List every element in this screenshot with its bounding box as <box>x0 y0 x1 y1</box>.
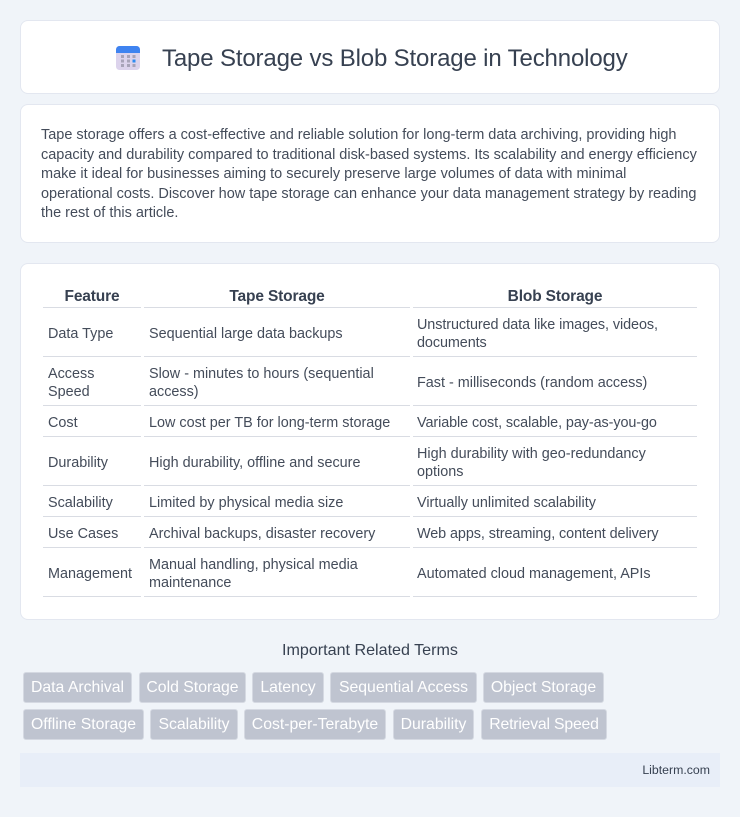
intro paragraph: the rest of this article. <box>41 205 178 221</box>
intro card <box>20 104 720 243</box>
related terms tags <box>23 672 607 740</box>
comparison table: Sequential large data backups <box>149 326 343 342</box>
related terms tags: Cost-per-Terabyte <box>252 716 378 733</box>
comparison table: access) <box>149 384 199 400</box>
intro paragraph: capacity and durability compared to traditional disk-based systems. Its scalability and energy efficiency <box>41 147 697 163</box>
comparison table: Blob Storage <box>508 288 602 305</box>
comparison table: Virtually unlimited scalability <box>417 495 596 511</box>
related terms heading: Important Related Terms <box>282 641 458 659</box>
comparison table: Variable cost, scalable, pay-as-you-go <box>417 415 657 431</box>
comparison table: Web apps, streaming, content delivery <box>417 526 659 542</box>
footer credit: Libterm.com <box>642 763 710 777</box>
intro paragraph <box>41 127 697 221</box>
intro paragraph: operational costs. Discover how tape storage can enhance your data management strategy by reading <box>41 186 696 202</box>
comparison table: Feature <box>65 288 119 305</box>
comparison table: Slow - minutes to hours (sequential <box>149 366 374 382</box>
related terms tags: Data Archival <box>31 679 124 696</box>
comparison table: options <box>417 464 463 480</box>
comparison table: High durability with geo-redundancy <box>417 446 646 462</box>
comparison table: Fast - milliseconds (random access) <box>417 375 647 391</box>
comparison table: Low cost per TB for long-term storage <box>149 415 390 431</box>
comparison table: Durability <box>48 455 108 471</box>
intro paragraph: Tape storage offers a cost-effective and reliable solution for long-term data archiving, providing high <box>41 127 676 143</box>
related terms tags: Durability <box>401 716 466 733</box>
title: Tape Storage vs Blob Storage in Technology <box>162 45 628 72</box>
comparison table: Manual handling, physical media <box>149 557 358 573</box>
footer bar <box>20 753 720 787</box>
comparison table: Automated cloud management, APIs <box>417 566 651 582</box>
title card <box>20 20 720 94</box>
comparison table <box>43 288 697 597</box>
related terms tags: Object Storage <box>491 679 596 696</box>
related terms tags: Sequential Access <box>339 679 468 696</box>
comparison table: maintenance <box>149 575 231 591</box>
related terms tags: Retrieval Speed <box>489 716 599 733</box>
related terms tags: Scalability <box>158 716 230 733</box>
comparison table card <box>20 263 720 620</box>
comparison table: documents <box>417 335 487 351</box>
comparison table: Scalability <box>48 495 113 511</box>
comparison table: Data Type <box>48 326 113 342</box>
comparison table: High durability, offline and secure <box>149 455 360 471</box>
comparison table: Management <box>48 566 132 582</box>
comparison table: Use Cases <box>48 526 118 542</box>
comparison table: Unstructured data like images, videos, <box>417 317 658 333</box>
comparison table: Limited by physical media size <box>149 495 343 511</box>
comparison table: Access <box>48 366 94 382</box>
icon: calendar app <box>116 46 140 70</box>
intro paragraph: make it ideal for businesses aiming to securely preserve large volumes of data with minimal <box>41 166 626 182</box>
comparison table: Speed <box>48 384 90 400</box>
related terms tags: Cold Storage <box>146 679 239 696</box>
related terms tags: Offline Storage <box>31 716 136 733</box>
comparison table: Tape Storage <box>229 288 325 305</box>
related terms tags: Latency <box>260 679 316 696</box>
comparison table: Cost <box>48 415 78 431</box>
comparison table: Archival backups, disaster recovery <box>149 526 375 542</box>
